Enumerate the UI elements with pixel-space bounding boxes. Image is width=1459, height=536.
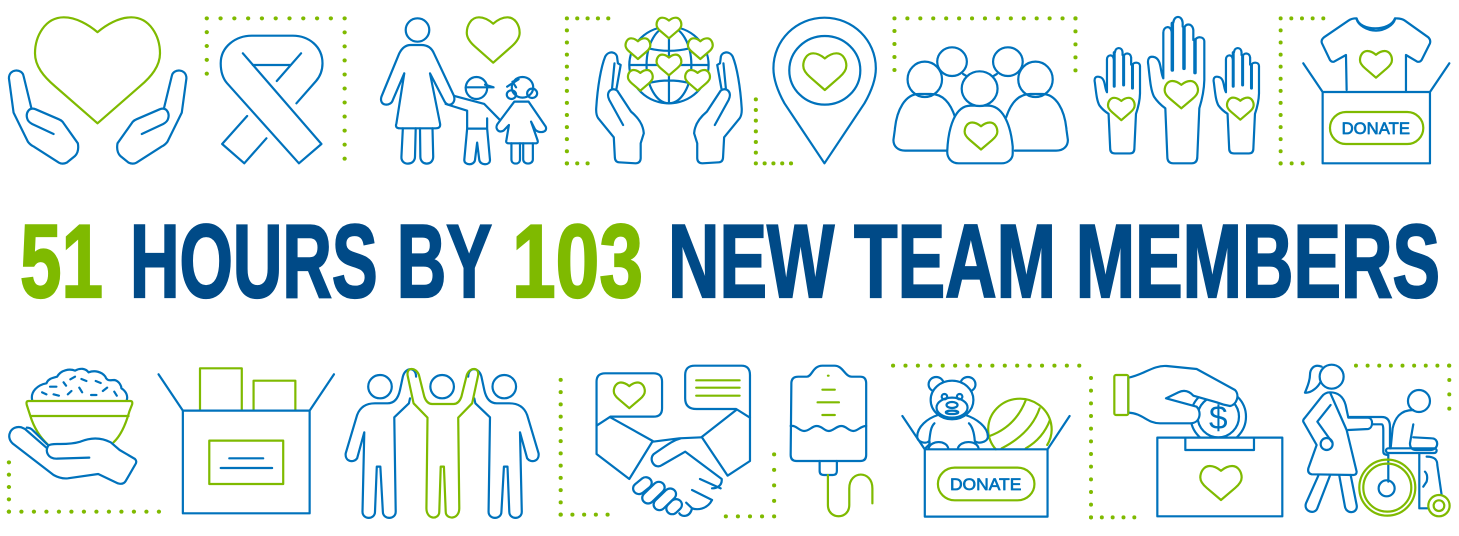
icon: hands holding heart (9, 17, 186, 164)
t-shirt (1322, 18, 1430, 91)
dotted frame: food bowl (9, 462, 160, 512)
hand (1128, 366, 1237, 423)
left hand (1095, 48, 1140, 153)
globe (629, 27, 709, 103)
donate pill (1330, 112, 1423, 144)
left hand (596, 52, 644, 163)
icon: awareness ribbon (221, 36, 322, 163)
dotted frame: map pin (756, 99, 791, 163)
right hand (694, 52, 742, 163)
cuff (1114, 375, 1128, 415)
icon: hand dropping coin in box (1114, 366, 1282, 516)
dotted frame: wheelchair (1356, 366, 1450, 423)
box (902, 416, 1070, 517)
donate label: DONATE (1342, 119, 1410, 138)
icon: map pin with heart (773, 18, 876, 163)
icon: open box with packages (159, 368, 334, 513)
teddy bear (917, 377, 988, 449)
mother (381, 18, 454, 164)
middle hand (1148, 17, 1204, 163)
heart (614, 382, 645, 408)
food (32, 369, 127, 400)
heart (803, 53, 846, 90)
heart (1360, 51, 1392, 78)
icon: three people high five (346, 369, 539, 518)
right person (468, 369, 539, 518)
heart bubble (597, 373, 662, 426)
cuffs (597, 410, 750, 479)
heart (1200, 466, 1242, 500)
dotted frame: globe (567, 18, 609, 163)
right hand (117, 71, 186, 164)
dollar sign: $ (1209, 400, 1228, 437)
dotted frame: t-shirt box (1281, 18, 1324, 163)
dotted frame: toy box and coin (893, 366, 1135, 517)
label (209, 441, 283, 484)
heart (467, 17, 520, 63)
icon: handshake with speech bubbles (597, 366, 750, 517)
hours by: HOURS BY (130, 204, 492, 320)
number 51: 51 (20, 204, 103, 320)
coin (1191, 389, 1246, 444)
box (1157, 438, 1282, 516)
icon: toy donation box (902, 377, 1070, 517)
left person (346, 369, 416, 518)
title (20, 204, 1440, 320)
boy (446, 77, 499, 164)
donate pill (938, 468, 1034, 500)
box (159, 374, 334, 513)
icon: hand holding food bowl (9, 369, 136, 484)
man in wheelchair (1348, 390, 1442, 508)
middle person (407, 369, 478, 518)
icon: caregiver with wheelchair (1303, 365, 1450, 516)
hearts on globe (626, 18, 713, 91)
icon: IV drip bag (791, 366, 872, 516)
box (1303, 63, 1449, 163)
woman (1303, 365, 1372, 512)
icon: family with heart (381, 17, 546, 164)
left hand (9, 71, 78, 164)
heart (965, 122, 997, 149)
icon: group of people with heart (893, 47, 1068, 163)
hand (9, 427, 136, 484)
clasped hands (652, 437, 722, 516)
palm hearts (1108, 81, 1254, 120)
caster (1428, 495, 1450, 516)
dotted frame: handshake (561, 368, 775, 516)
dotted frame: group (894, 18, 1076, 71)
donate label: DONATE (950, 474, 1021, 494)
tube (828, 475, 872, 516)
number 103: 103 (512, 204, 643, 320)
dotted frame: ribbon (207, 18, 345, 159)
girl (496, 77, 546, 164)
large heart (35, 17, 160, 123)
ball (988, 399, 1052, 449)
bowl (26, 401, 132, 445)
wheel (1359, 460, 1415, 516)
right hand (1214, 48, 1259, 153)
icon: three raised hands with hearts (1095, 17, 1259, 163)
icon: t-shirt donation box (1303, 18, 1449, 163)
icon: hands holding globe with hearts (596, 18, 742, 163)
text bubble (685, 366, 750, 418)
packages (200, 368, 295, 410)
